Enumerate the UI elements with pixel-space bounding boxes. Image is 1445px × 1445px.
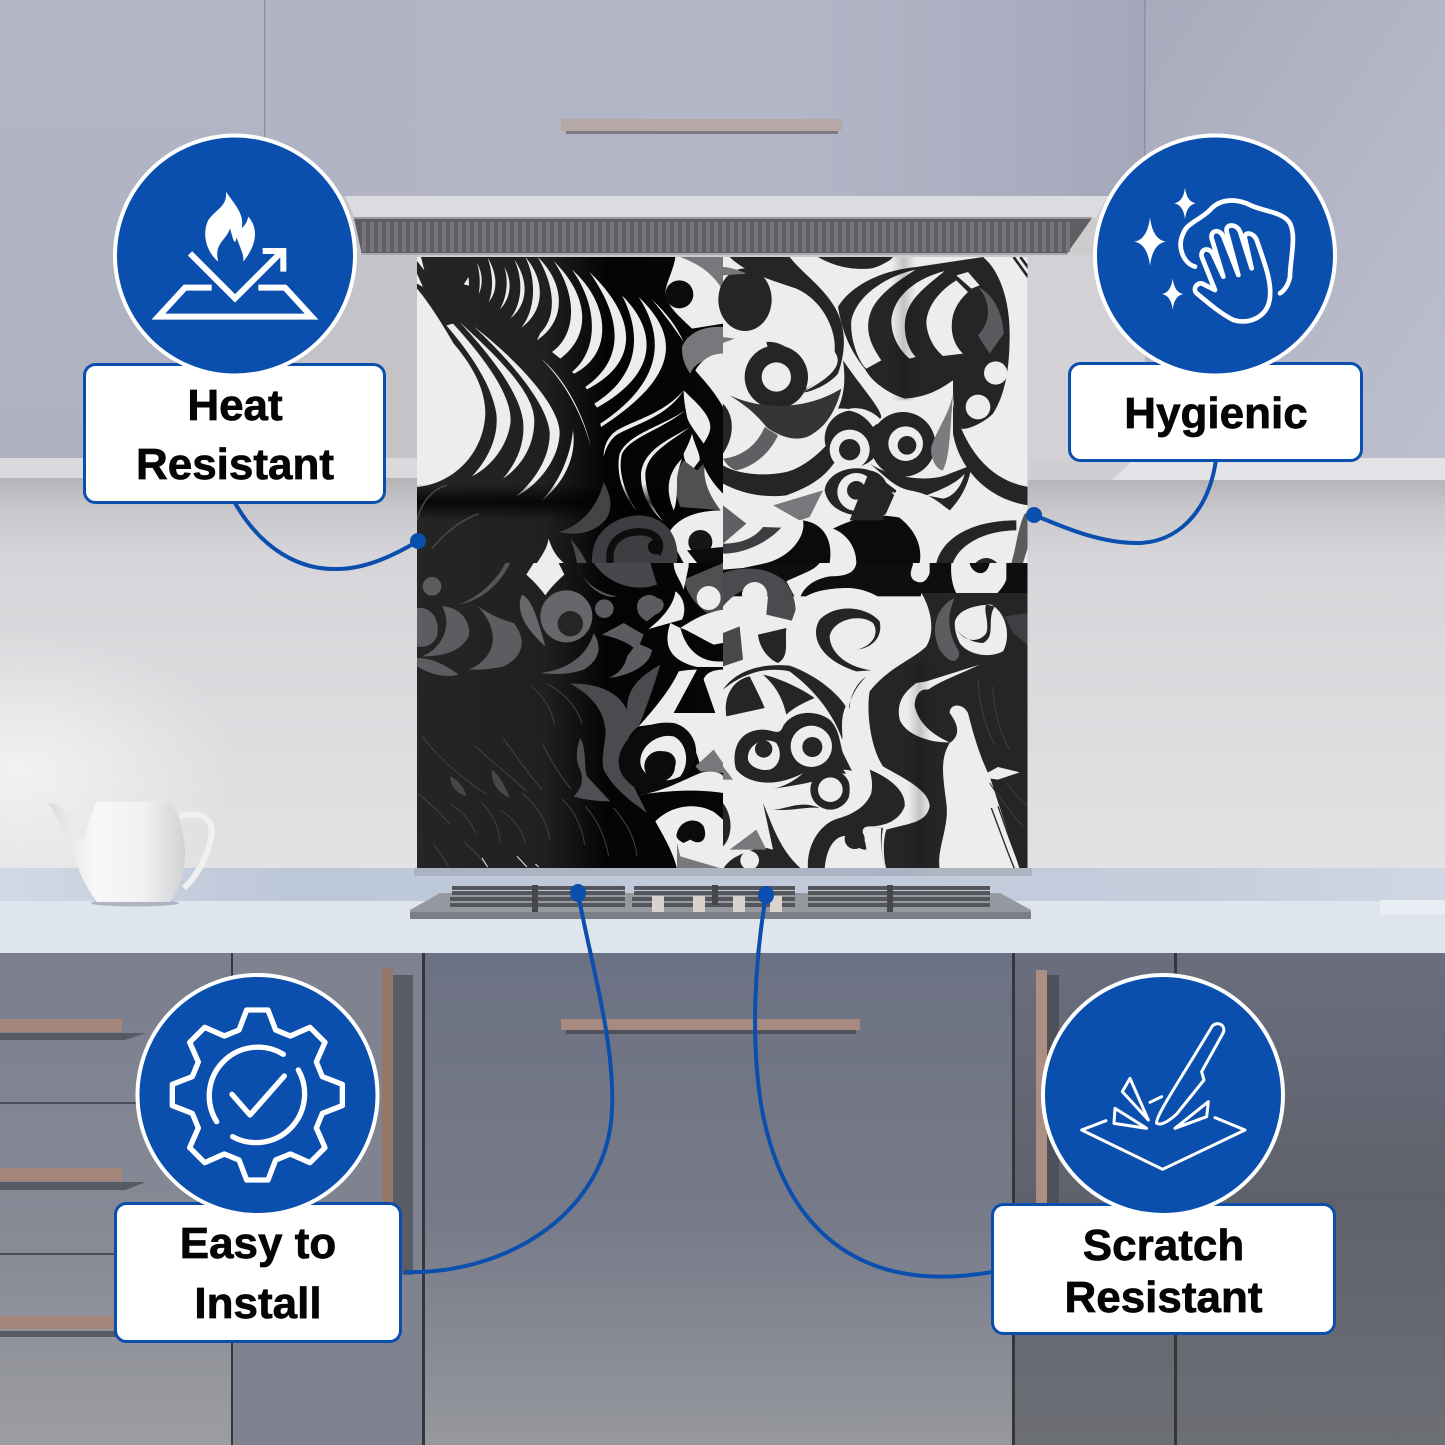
label box (116, 1204, 400, 1342)
white and grey motifs on right edge (665, 257, 723, 329)
callout: Easy to Install (116, 975, 400, 1342)
connector: Hygienic (1026, 460, 1216, 543)
lower cabinets (0, 953, 232, 1445)
wall beside hood left (264, 196, 418, 458)
fold shadow (417, 484, 662, 520)
panel shadow (414, 868, 1032, 876)
connector: Scratch Resistant (755, 886, 992, 1277)
label box (84, 364, 384, 502)
wall beside hood right (1028, 255, 1145, 458)
label box (992, 1204, 1334, 1334)
pattern quadrant: bottom left (417, 563, 723, 869)
upper cabinet: left (0, 0, 264, 458)
range hood (345, 196, 1108, 218)
icon: gear with check mark (172, 1010, 342, 1180)
upper cabinet: right (1145, 0, 1445, 458)
right side figure (899, 665, 980, 742)
splashback panel: black and white swirl pattern (417, 257, 1029, 870)
label text: Heat (187, 381, 283, 430)
callout: Hygienic (1070, 136, 1362, 460)
wall (0, 478, 1445, 870)
icon: knife scratching surface (1082, 1024, 1245, 1169)
pattern quadrant: top left (417, 257, 723, 563)
icon: flame on surface (158, 192, 312, 317)
cooktop (410, 885, 1031, 919)
teapot (48, 802, 212, 906)
top cabinet handle (561, 119, 842, 131)
label text: Resistant (136, 440, 334, 489)
label text: Hygienic (1124, 389, 1308, 438)
connector: Heat Resistant (235, 503, 426, 569)
grey swirl (559, 482, 610, 534)
pattern quadrant: bottom right (723, 563, 1029, 870)
connector: Easy to Install (404, 884, 612, 1272)
label text: Install (194, 1279, 322, 1328)
upper cabinet: middle (264, 0, 1145, 196)
big blob with stripes (838, 257, 1010, 429)
callout: Heat Resistant (84, 136, 384, 502)
wall light glow (0, 630, 240, 910)
white and grey shapes right (684, 563, 723, 613)
countertop (0, 868, 1445, 901)
callout: Scratch Resistant (992, 975, 1334, 1334)
label text: Resistant (1064, 1273, 1263, 1322)
icon circle (115, 136, 355, 376)
icon circle (1095, 136, 1335, 376)
icon: hand wiping with sparkles (1134, 188, 1293, 321)
label text: Easy to (180, 1219, 336, 1268)
pattern quadrant: top right (718, 257, 1029, 586)
icon circle (1043, 975, 1283, 1215)
label box (1070, 364, 1362, 460)
centre swirls (838, 360, 881, 430)
icon circle (138, 975, 378, 1215)
cabinet handles (0, 1033, 146, 1040)
label text: Scratch (1083, 1221, 1244, 1270)
